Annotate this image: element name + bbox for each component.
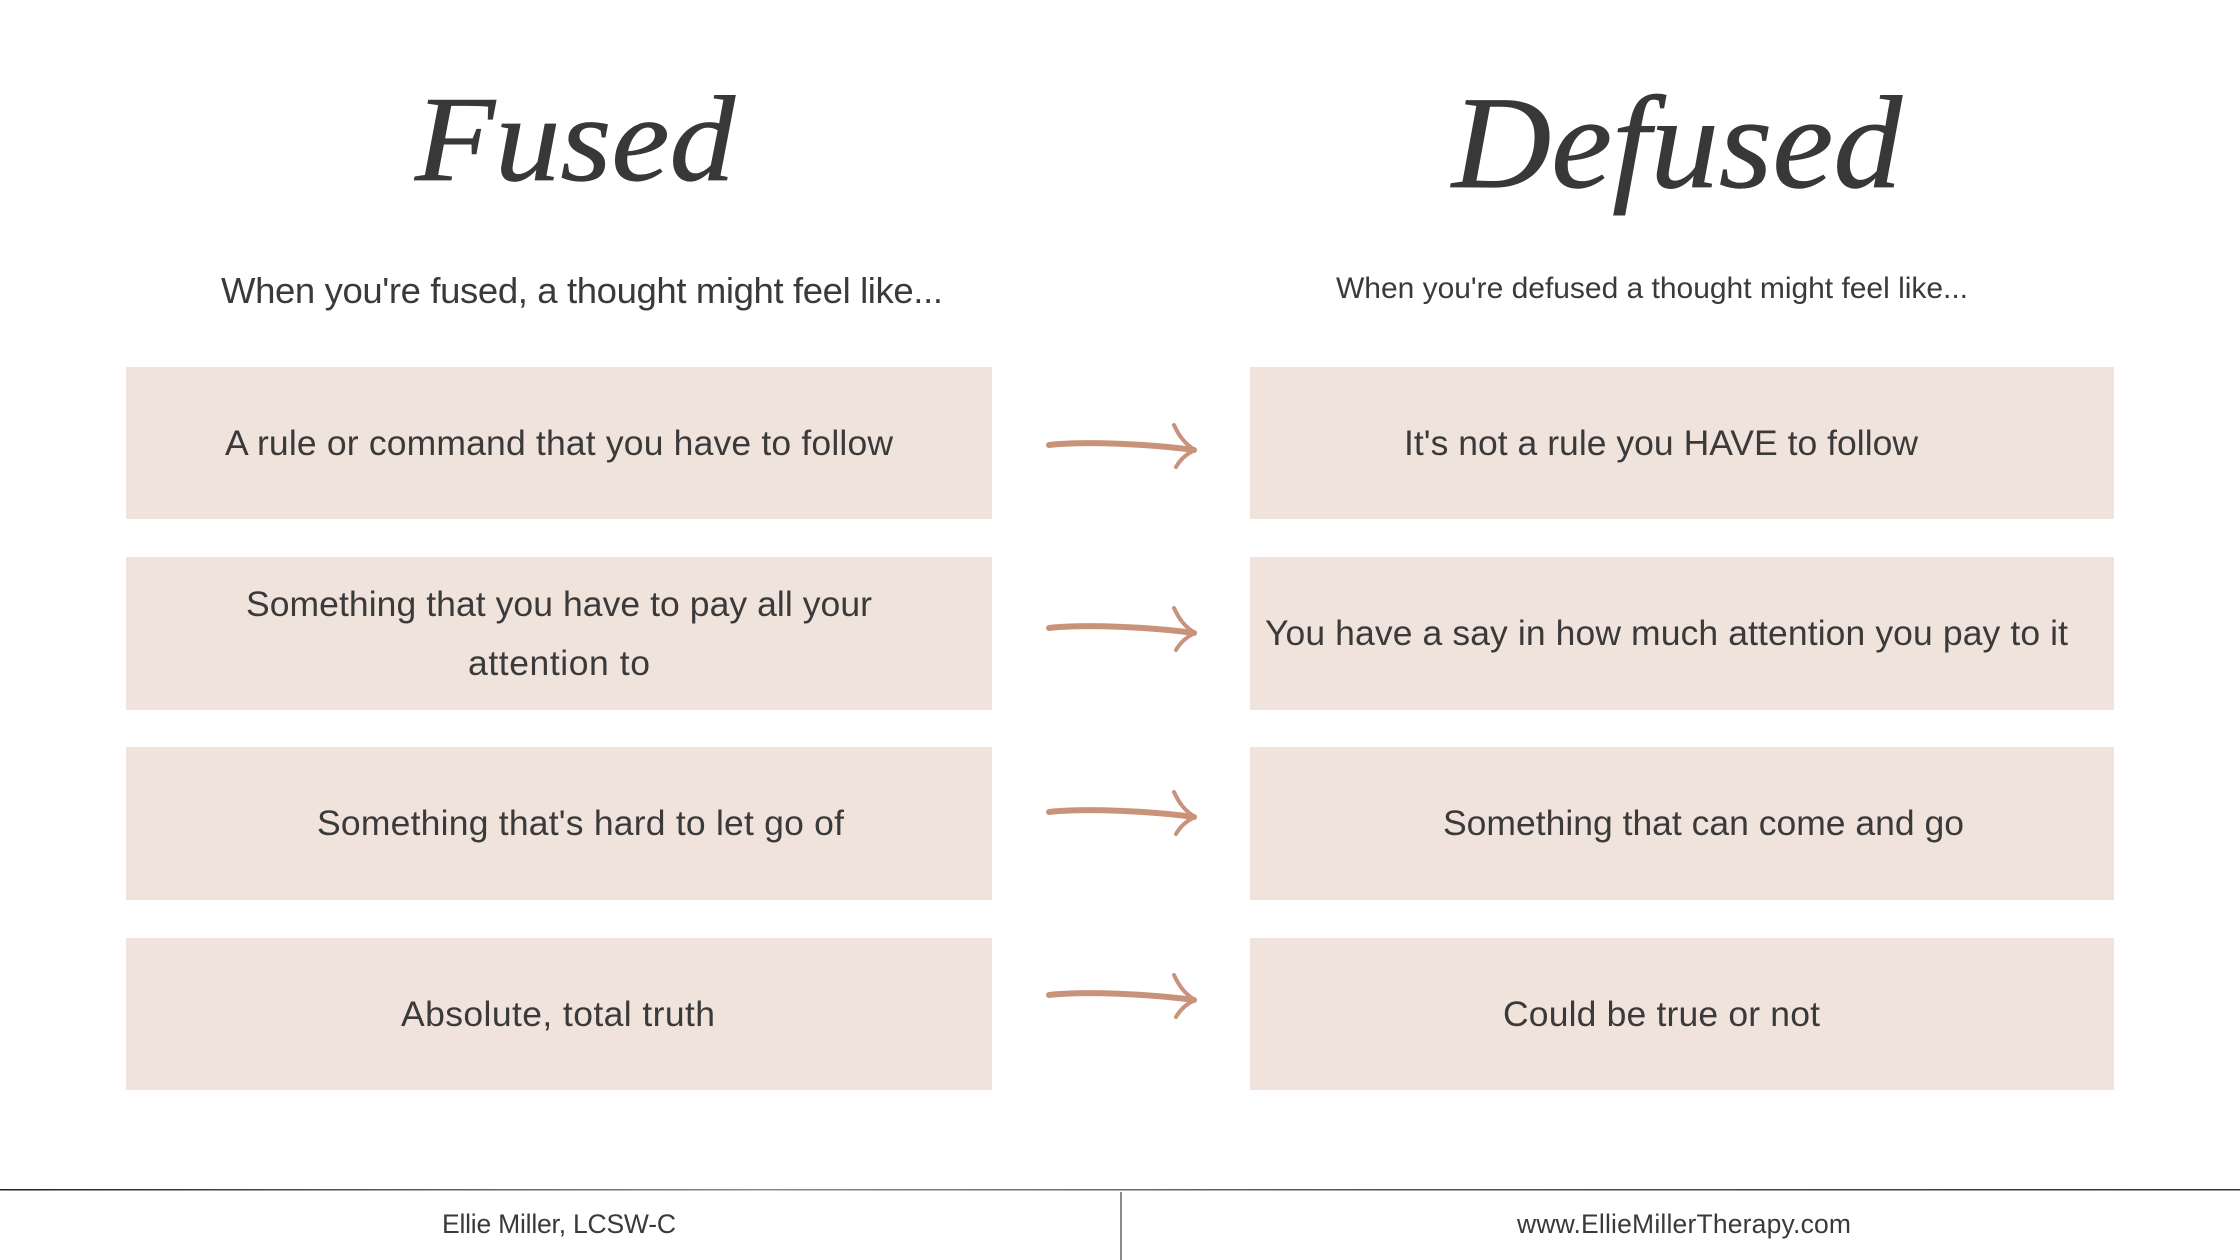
row 1 right: It's not a rule you HAVE to follow: [1404, 423, 1918, 463]
row 1 right: [1250, 367, 2114, 519]
panel: fused column: [126, 367, 992, 1090]
row 3 left: Something that's hard to let go of: [317, 803, 844, 843]
title: Defused: Defused: [1450, 69, 1903, 216]
footer: website: www.EllieMillerTherapy.com: [1516, 1209, 1851, 1239]
subheading: defused: When you're defused a thought might feel like...: [1336, 272, 1968, 305]
row 3 left: [126, 747, 992, 900]
subheading: fused: When you're fused, a thought might feel like...: [221, 270, 943, 311]
panel: defused column: [1250, 367, 2114, 1090]
arrow row 3: [1049, 792, 1195, 834]
row 2 left: [126, 557, 992, 710]
row 4 right: [1250, 938, 2114, 1090]
footer: author: Ellie Miller, LCSW-C: [442, 1209, 676, 1239]
title: Fused: Fused: [414, 72, 736, 207]
row 1 left: [126, 367, 992, 519]
row 4 right: Could be true or not: [1503, 994, 1820, 1034]
footer: [0, 1189, 2240, 1260]
row 4 left: Absolute, total truth: [401, 994, 715, 1034]
row 4 left: [126, 938, 992, 1090]
row 2 left: attention to: [468, 643, 650, 683]
row 2 right: You have a say in how much attention you pay to it: [1265, 613, 2068, 653]
arrow row 1: [1049, 425, 1195, 467]
row 3 right: Something that can come and go: [1443, 803, 1964, 843]
arrow row 2: [1049, 608, 1195, 650]
row 2 left: Something that you have to pay all your: [246, 584, 872, 624]
row 1 left: A rule or command that you have to follow: [225, 423, 893, 463]
row 3 right: [1250, 747, 2114, 900]
row 2 right: [1250, 557, 2114, 710]
arrow row 4: [1049, 975, 1195, 1017]
